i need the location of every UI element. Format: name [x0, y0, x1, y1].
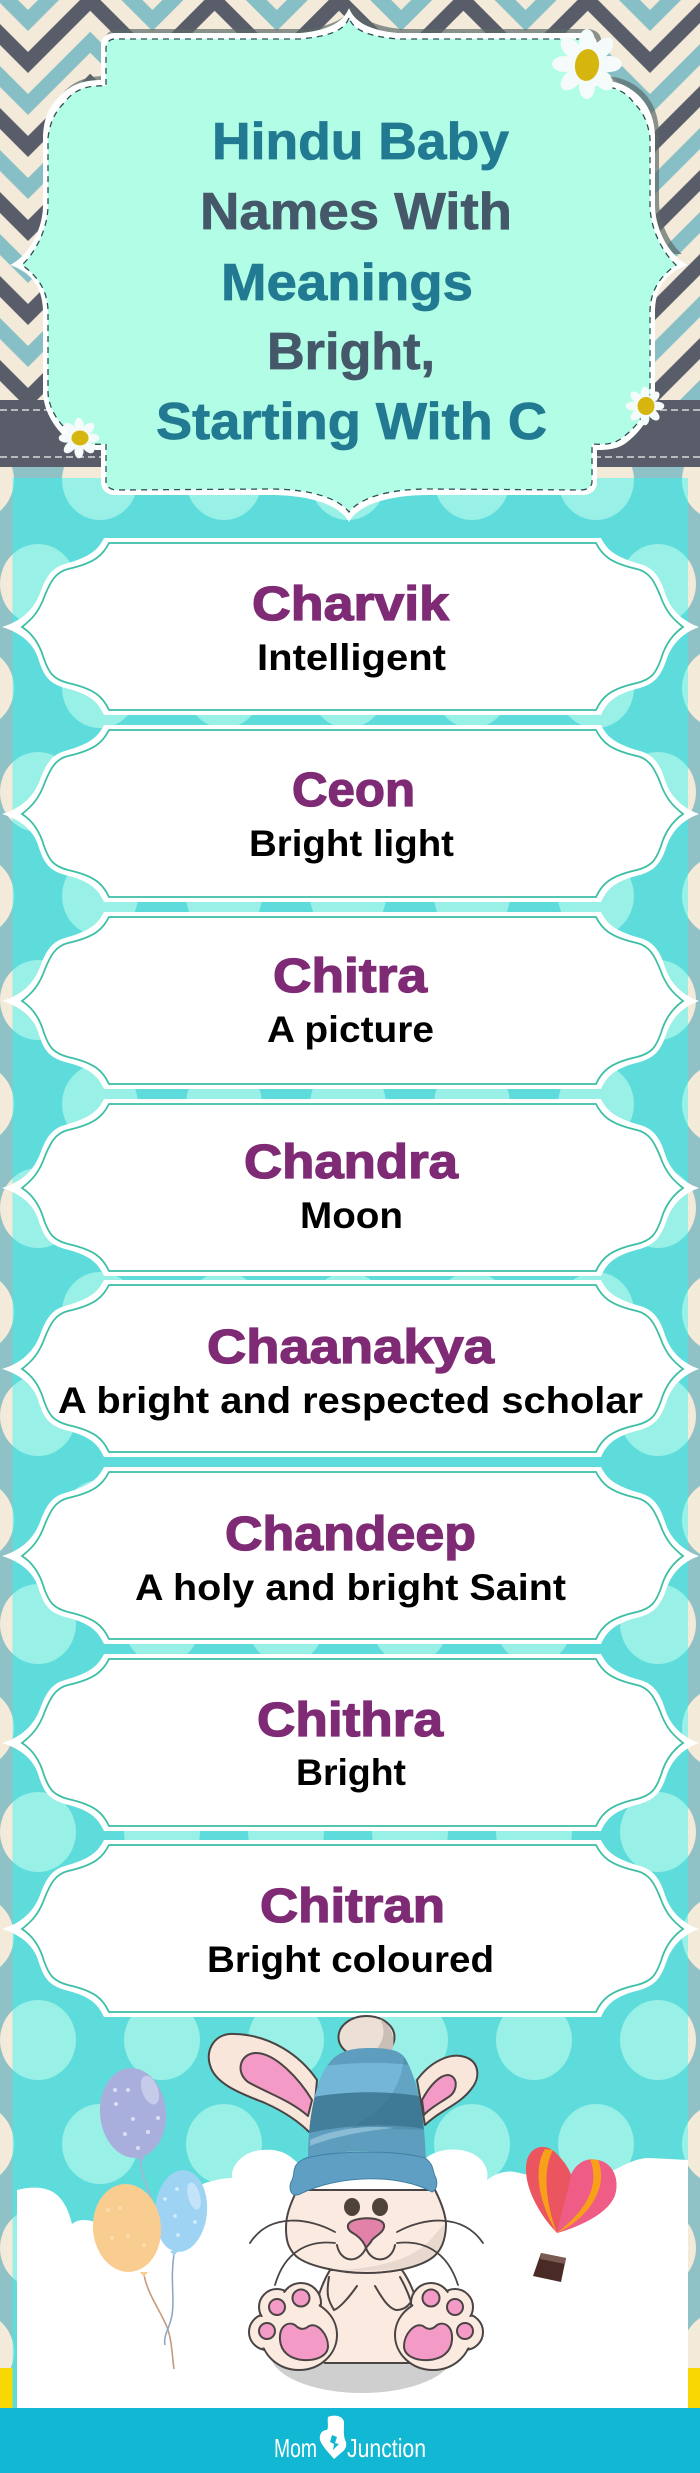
white clouds [17, 2150, 688, 2408]
card: Chitra: A picture [267, 1009, 434, 1050]
title: Bright, [267, 323, 435, 381]
plaque shadow [24, 16, 682, 254]
card: Chitra: Chitra [273, 950, 427, 1003]
card: Ceon: Bright light [249, 823, 454, 864]
right foot [395, 2283, 483, 2370]
title: Starting With C [156, 393, 547, 451]
logo: MomJunction: Junction [347, 2433, 426, 2463]
nose [348, 2218, 384, 2248]
grey stitched ribbon [0, 400, 700, 467]
plaque dashed stitching [22, 18, 676, 512]
heart envelope [526, 2147, 616, 2233]
basket [533, 2253, 566, 2282]
card: Ceon [2, 725, 699, 902]
arms [328, 2277, 411, 2310]
icon: daisy bottom right [626, 387, 664, 425]
card: Charvik: Intelligent [257, 637, 446, 678]
card: Chandra [2, 1099, 699, 1276]
card: Chandeep: Chandeep [225, 1508, 476, 1561]
card: Chandra: Moon [300, 1195, 403, 1236]
icon: daisy bottom left [59, 418, 99, 458]
card: Ceon: Ceon [292, 764, 415, 817]
card: Chithra [2, 1654, 699, 1831]
purple balloon [96, 2065, 170, 2162]
card: Chitra [2, 912, 699, 1089]
card: Charvik: Charvik [252, 578, 449, 631]
footer bar [0, 2408, 700, 2473]
orange balloon [89, 2181, 165, 2277]
hat dome [308, 2048, 426, 2158]
logo: MomJunction: Mom [274, 2433, 317, 2463]
title: Meanings [221, 254, 473, 312]
right ear [417, 2056, 477, 2125]
left ear [209, 2034, 317, 2135]
mouth [337, 2245, 395, 2259]
hat band [290, 2152, 437, 2195]
plaque body [22, 18, 676, 512]
ground shadow [270, 2313, 454, 2393]
left foot [249, 2283, 337, 2370]
pom-pom [338, 2016, 394, 2058]
title: Hindu Baby [212, 113, 509, 171]
card: Chandeep: A holy and bright Saint [135, 1567, 566, 1608]
title: Names With [200, 183, 512, 241]
plaque white edge [10, 8, 688, 522]
card: Chitran [2, 1840, 699, 2017]
turquoise polka dot background [12, 478, 688, 2408]
head [286, 2190, 446, 2273]
eyes [344, 2198, 388, 2216]
card: Chandeep [2, 1467, 699, 1644]
card: Chithra: Chithra [257, 1694, 443, 1747]
card: Charvik [2, 538, 699, 715]
balloon strings [141, 2160, 174, 2369]
card: Chaanakya [2, 1280, 699, 1457]
bunny illustration [209, 2016, 483, 2393]
icon: daisy top right [552, 29, 622, 99]
hot air heart balloon [526, 2147, 616, 2282]
body [312, 2270, 422, 2363]
whiskers [250, 2221, 483, 2285]
chevron header background [0, 0, 700, 400]
title [156, 113, 547, 451]
balloons [89, 2065, 210, 2369]
card: Chithra: Bright [296, 1752, 406, 1793]
side strips with cream polka dots [0, 467, 700, 2408]
card: Chaanakya: A bright and respected scholar [58, 1380, 643, 1421]
blue balloon [152, 2168, 210, 2256]
logo: MomJunction [274, 2416, 426, 2463]
card: Chitran: Bright coloured [207, 1939, 494, 1980]
card: Chitran: Chitran [260, 1880, 445, 1933]
card: Chandra: Chandra [244, 1136, 458, 1189]
card: Chaanakya: Chaanakya [207, 1321, 494, 1374]
logo mark [320, 2416, 346, 2459]
title plaque [10, 4, 692, 522]
